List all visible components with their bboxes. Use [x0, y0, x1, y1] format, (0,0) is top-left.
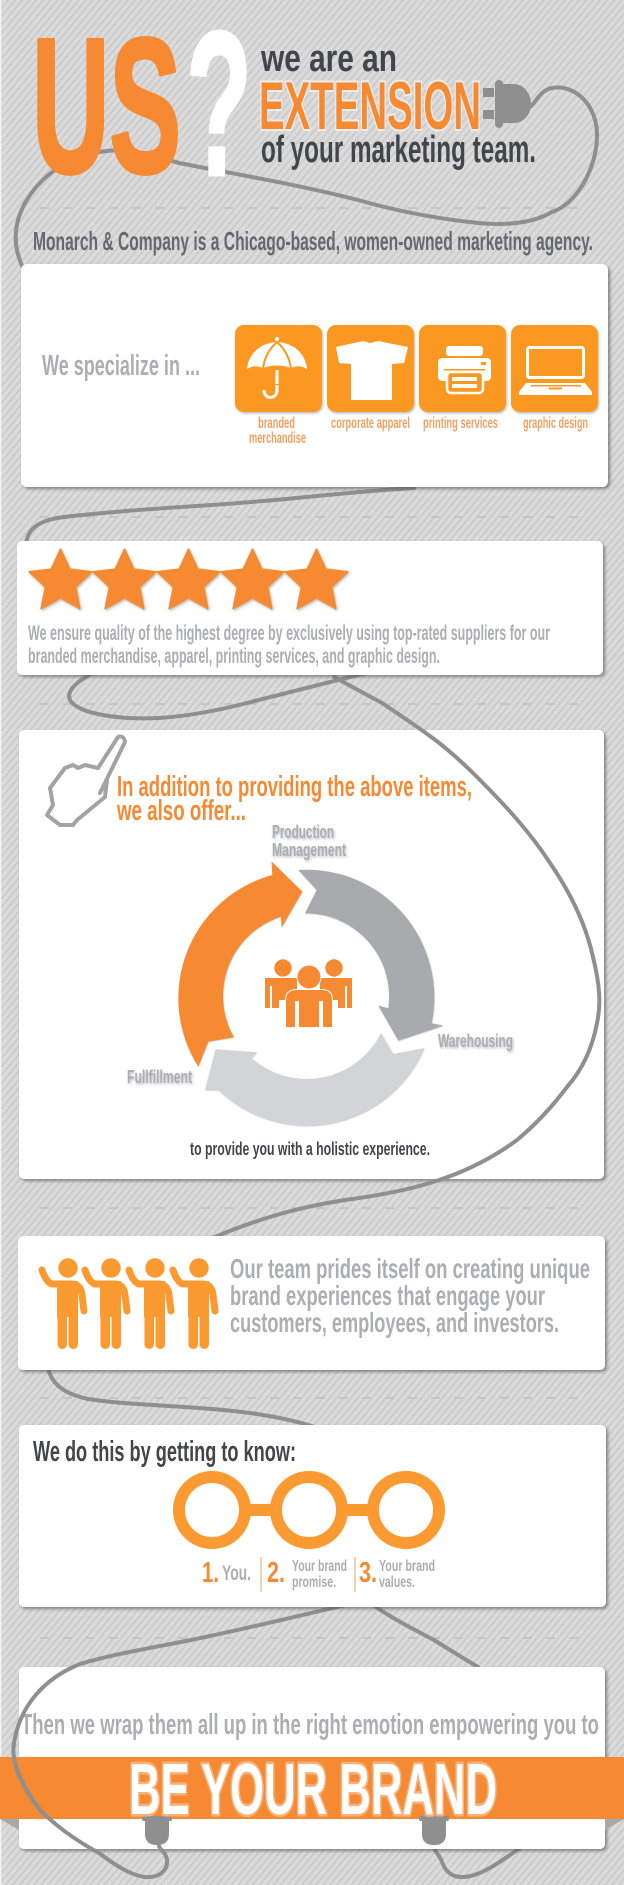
list: you, brand promise, brand values: 3.: [359, 1557, 377, 1589]
heading: also offer: [116, 771, 472, 827]
title: US?: US: [32, 0, 181, 213]
list: you, brand promise, brand values: promise.: [292, 1574, 336, 1591]
text: holistic experience: to provide you with a holistic experience.: [190, 1139, 430, 1159]
panel: quality: [17, 541, 603, 675]
cord: across offerings panel: [215, 677, 599, 1237]
text: team statement: [230, 1253, 590, 1338]
heading: we specialize in: We specialize in ...: [42, 350, 200, 382]
panel: closing: [0, 1667, 624, 1849]
ribbon folds: [0, 1819, 624, 1830]
panel: getting to know: [19, 1425, 606, 1607]
panel: additional offerings: [19, 730, 604, 1179]
list: you, brand promise, brand values: 2.: [267, 1557, 285, 1589]
labels: services: [249, 415, 588, 447]
title: we are an extension of your marketing team: we are an: [260, 38, 397, 80]
icon: top plug: [483, 80, 531, 128]
icon: t-shirt: [327, 325, 414, 412]
labels: services: branded: [258, 415, 295, 432]
labels: cycle stages: Production: [272, 822, 334, 842]
heading: also offer: we also offer...: [116, 795, 246, 827]
cord: left loop over panel: [13, 1664, 167, 1877]
cord: left loop to left plug: [80, 1605, 345, 1664]
icon: left plug: [142, 1807, 172, 1845]
labels: cycle stages: Management: [272, 840, 346, 860]
arrow: light grey: [205, 1033, 424, 1126]
labels: services: corporate apparel: [331, 415, 410, 432]
list: you, brand promise, brand values: Your brand: [292, 1558, 347, 1575]
icon: five stars: [29, 549, 348, 609]
title: we are an extension of your marketing team: [259, 38, 536, 171]
heading: getting to know: We do this by getting to know:: [33, 1436, 296, 1468]
panel: we specialize in: [21, 264, 608, 487]
cycle diagram: [178, 862, 443, 1126]
text: quality statement: [28, 622, 550, 668]
list: you, brand promise, brand values: Your brand: [379, 1558, 435, 1575]
icon: laptop: [511, 325, 598, 412]
icon: printer: [419, 325, 506, 412]
arrow: orange: [178, 862, 302, 1067]
labels: cycle stages: Warehousing: [438, 1031, 513, 1051]
icon: umbrella: [235, 325, 322, 412]
labels: services: merchandise: [249, 430, 306, 447]
list: you, brand promise, brand values: You.: [222, 1562, 251, 1585]
icon: four waving people: [42, 1258, 215, 1349]
icon: right plug: [419, 1807, 449, 1845]
icon: pointing hand: [47, 737, 125, 825]
labels: cycle stages: Fullfillment: [127, 1067, 192, 1087]
list: you, brand promise, brand values: values.: [379, 1574, 415, 1591]
arrow: grey: [298, 870, 443, 1041]
diagram: three linked rings: [179, 1477, 439, 1543]
icon: team of three: [265, 959, 352, 1027]
labels: services: printing services: [423, 415, 498, 432]
banner: [0, 1757, 624, 1819]
list: you, brand promise, brand values: [202, 1557, 435, 1592]
panel: team: [18, 1236, 605, 1370]
labels: cycle stages: [127, 822, 513, 1087]
list: you, brand promise, brand values: 1.: [202, 1557, 219, 1589]
